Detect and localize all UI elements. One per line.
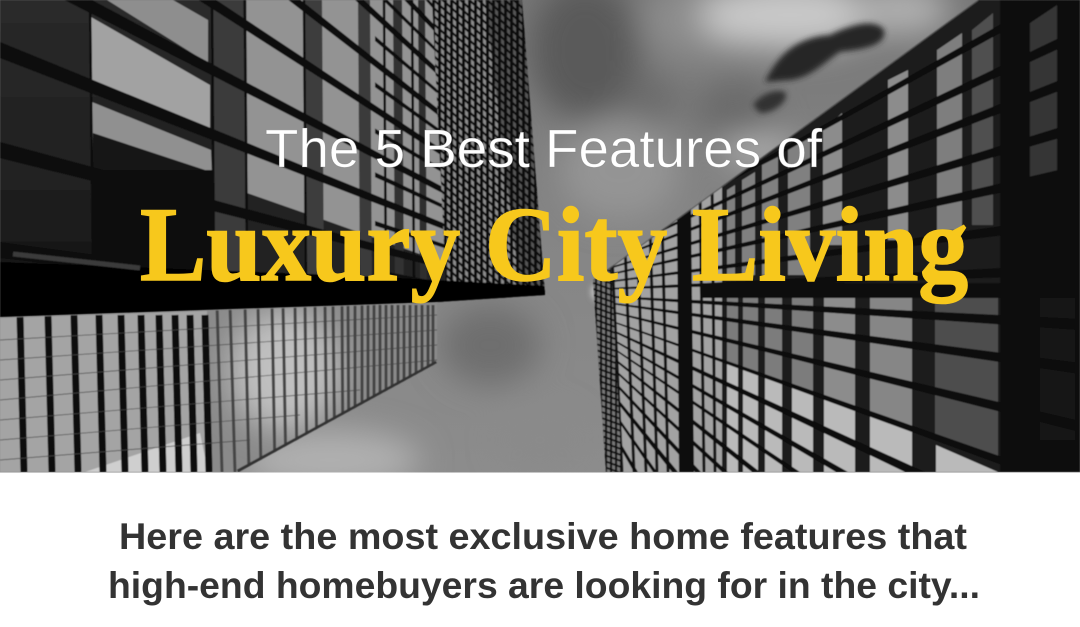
title line 1: The 5 Best Features of bbox=[265, 119, 823, 179]
buildings bbox=[0, 0, 1080, 472]
intro text bbox=[108, 516, 980, 606]
intro text: high-end homebuyers are looking for in the city... bbox=[108, 565, 980, 606]
upper left building bbox=[0, 0, 546, 318]
photo: skyscrapers seen from below bbox=[0, 0, 1080, 490]
sky bbox=[0, 0, 1080, 490]
dark cloud bbox=[753, 24, 884, 113]
right building bbox=[592, 0, 1080, 472]
intro text: Here are the most exclusive home features that bbox=[119, 516, 967, 557]
lower left building bbox=[0, 300, 442, 472]
title line 2: Luxury City Living bbox=[140, 186, 968, 303]
